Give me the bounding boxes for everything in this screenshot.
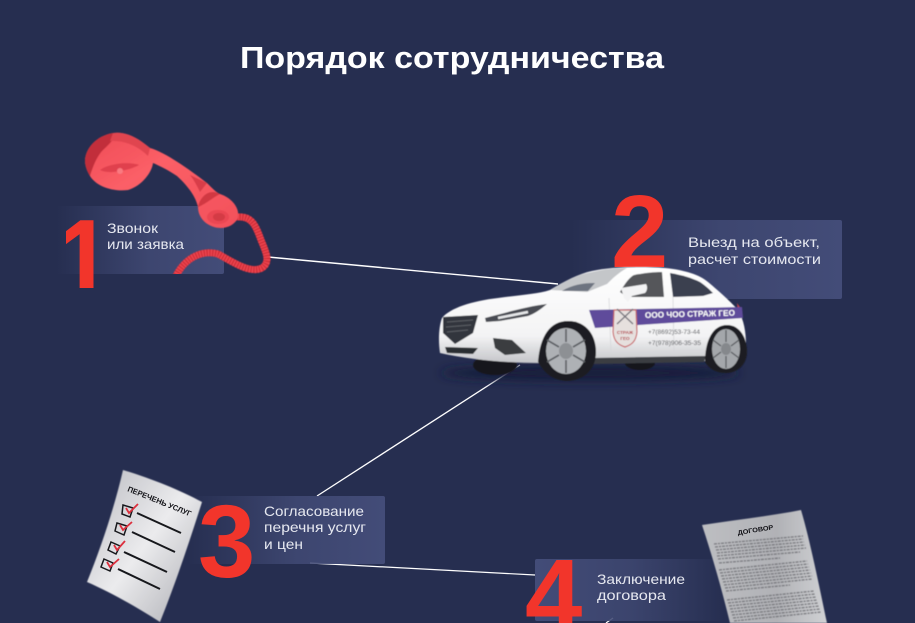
step 2 text (688, 234, 821, 267)
step 4 text: договора (597, 587, 666, 603)
connector: step 1 to step 2 (268, 257, 558, 284)
step 1 text (107, 220, 184, 252)
step 3 number: 3 (198, 484, 255, 599)
step 4 text: Заключение (597, 571, 685, 587)
connector: step 2 to step 3 (317, 365, 520, 496)
infographic canvas (66, 47, 842, 623)
connector: step 3 to step 4 (310, 563, 535, 575)
step 1 (66, 132, 272, 288)
icon: contract document (702, 510, 827, 623)
front fascia (443, 304, 547, 355)
door seam (609, 297, 703, 353)
car logo shield: СТРАЖ (617, 330, 634, 335)
icon: telephone cord (176, 217, 267, 276)
car shadow (440, 365, 740, 381)
step 3 (87, 470, 385, 622)
step 3 text: перечня услуг (264, 519, 366, 535)
title: Порядок сотрудничества (240, 41, 665, 75)
panel: step 2 (570, 220, 842, 299)
step 3 text: Согласование (264, 503, 364, 519)
far wheels (473, 355, 655, 375)
car livery stripe (589, 307, 743, 328)
car body (439, 267, 746, 363)
step 4 text (597, 571, 685, 603)
step 2 text: Выезд на объект, (688, 234, 820, 250)
step 1 text: или заявка (107, 236, 184, 252)
icon: telephone handset (85, 133, 238, 228)
contract heading: ДОГОВОР (737, 524, 775, 537)
checklist ticks (107, 504, 138, 567)
step 2 (439, 174, 842, 381)
panel: step 3 (187, 496, 385, 564)
step 1 text: Звонок (107, 220, 159, 236)
windshield (551, 268, 627, 292)
panel: step 4 (535, 559, 725, 621)
contract sheet (702, 510, 827, 623)
checklist heading: ПЕРЕЧЕНЬ УСЛУГ (126, 485, 193, 519)
car logo shield (613, 309, 637, 347)
step 4 (525, 510, 827, 623)
car phone numbers: +7(8692)53-73-44 (648, 329, 700, 336)
step 2 number: 2 (611, 174, 668, 289)
panel: step 1 (56, 206, 224, 274)
step 3 text (264, 503, 366, 552)
car logo shield: ГЕО (620, 336, 630, 341)
checklist sheet (87, 470, 202, 622)
rear wheel (705, 325, 747, 373)
taillight (737, 303, 742, 314)
front wheel (538, 321, 596, 381)
step 1 number: 1 (56, 195, 112, 328)
car phone numbers: +7(978)906-35-35 (648, 340, 701, 347)
side skirt (592, 356, 706, 364)
contract text lines (714, 536, 821, 621)
mirror (621, 284, 647, 302)
car (439, 267, 747, 381)
checklist rows (101, 505, 181, 589)
car phone numbers (648, 329, 701, 347)
side windows (620, 272, 713, 297)
windshield reflection (562, 283, 595, 291)
icon: services checklist (87, 470, 202, 622)
step 2 text: расчет стоимости (688, 251, 821, 267)
car livery text: ООО ЧОО СТРАЖ ГЕО (645, 308, 735, 320)
step 3 text: и цен (264, 536, 303, 552)
connector: step 4 onward (606, 618, 613, 623)
